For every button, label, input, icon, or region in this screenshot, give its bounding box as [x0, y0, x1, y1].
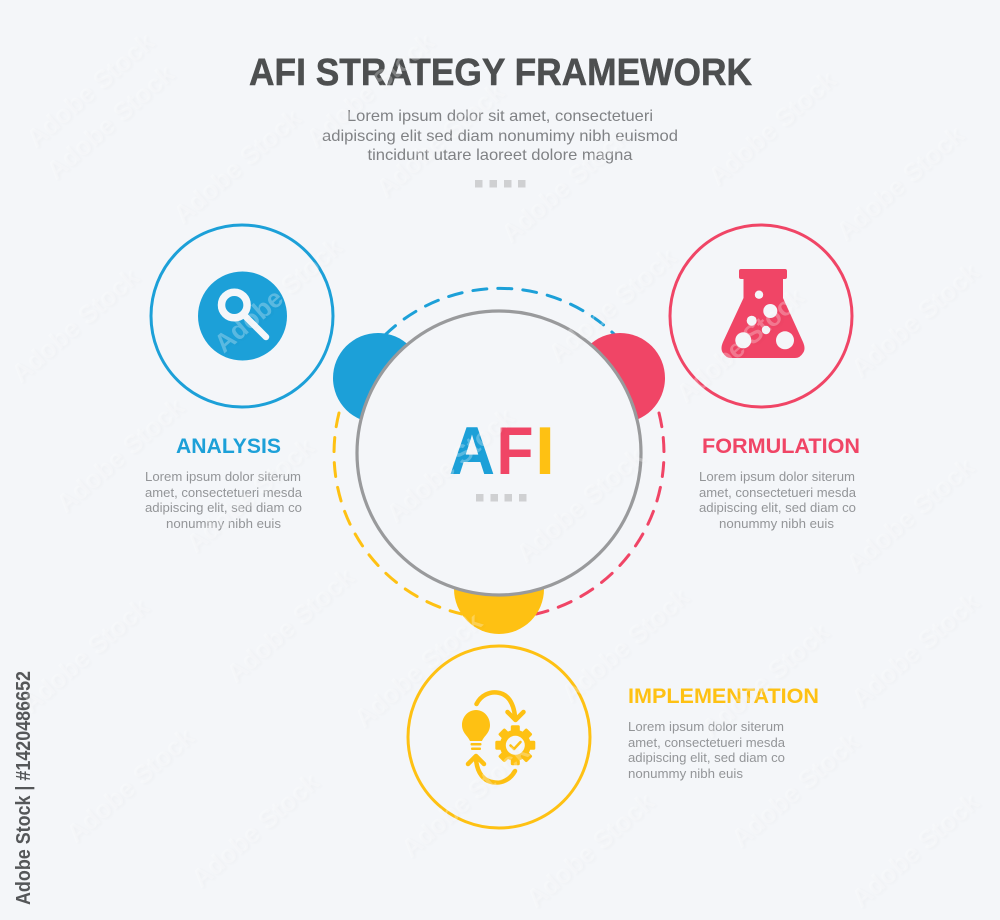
node: blue	[333, 333, 423, 423]
watermark overlay: Adobe Stock	[725, 727, 865, 853]
center label AFI: A	[449, 413, 495, 489]
text block: analysis: amet, consectetueri mesda	[145, 486, 302, 500]
watermark overlay: Adobe Stock	[830, 120, 970, 246]
watermark overlay: Adobe Stock	[520, 787, 660, 913]
text block: implementation: Lorem ipsum dolor siterum	[628, 720, 784, 734]
subtitle text	[322, 108, 678, 164]
icon: flask	[722, 269, 804, 358]
dashed ring: yellow arc	[334, 413, 462, 614]
watermark overlay: Adobe Stock	[208, 232, 348, 358]
title: AFI STRATEGY FRAMEWORK	[249, 52, 753, 94]
watermark overlay: Adobe Stock	[555, 582, 695, 708]
watermark overlay: Adobe Stock	[840, 452, 980, 578]
subtitle text: tincidunt utare laoreet dolore magna	[368, 147, 633, 164]
watermark overlay: Adobe Stock	[220, 562, 360, 688]
dashed ring: red arc	[536, 413, 664, 614]
text block: formulation	[699, 470, 856, 531]
watermark overlay: Adobe Stock	[60, 722, 200, 848]
center label AFI: I	[535, 413, 555, 489]
text block: implementation: nonummy nibh euis	[628, 767, 743, 781]
center circle	[357, 311, 641, 595]
panel: formulation icon circle	[670, 225, 852, 407]
watermark overlay: Adobe Stock	[542, 242, 682, 368]
stock id side text: Adobe Stock | #1420486652	[13, 671, 35, 905]
watermark overlay: Adobe Stock	[702, 65, 842, 191]
panel: implementation icon circle	[408, 646, 590, 828]
text block: formulation: adipiscing elit, sed diam co	[699, 501, 856, 515]
watermark overlay: Adobe Stock	[695, 617, 835, 743]
header dots	[475, 180, 526, 188]
watermark overlay: Adobe Stock	[300, 27, 440, 153]
watermark overlay: Adobe Stock	[5, 262, 145, 388]
text block: formulation: nonummy nibh euis	[719, 517, 834, 531]
watermark overlay: Adobe Stock	[180, 432, 320, 558]
node: red	[575, 333, 665, 423]
text block: implementation: adipiscing elit, sed diam co	[628, 751, 785, 765]
watermark overlay: Adobe Stock	[370, 77, 510, 203]
watermark overlay: Adobe Stock	[670, 282, 810, 408]
text block: analysis: Lorem ipsum dolor siterum	[145, 470, 301, 484]
watermark overlay: Adobe Stock	[185, 767, 325, 893]
center dots	[476, 494, 526, 502]
watermark overlay: Adobe Stock	[845, 257, 985, 383]
text block: formulation: Lorem ipsum dolor siterum	[699, 470, 855, 484]
text block: analysis	[145, 470, 302, 531]
watermark overlay: Adobe Stock	[495, 122, 635, 248]
watermark overlay: Adobe Stock	[40, 59, 180, 185]
heading: analysis: ANALYSIS	[176, 435, 281, 458]
text block: formulation: amet, consectetueri mesda	[699, 486, 856, 500]
text block: implementation: amet, consectetueri mesda	[628, 736, 785, 750]
dashed ring: blue arc	[385, 288, 615, 335]
center label AFI: F	[496, 413, 534, 489]
watermark overlay: Adobe Stock	[20, 27, 160, 153]
watermark overlay: Adobe Stock	[50, 392, 190, 518]
watermark overlay: Adobe Stock	[348, 607, 488, 733]
heading: formulation: FORMULATION	[702, 435, 860, 458]
subtitle text: Lorem ipsum dolor sit amet, consectetueri	[347, 108, 653, 125]
panel: analysis icon circle	[151, 225, 333, 407]
watermark overlay: Adobe Stock	[167, 103, 307, 229]
watermark overlay: Adobe Stock	[380, 402, 520, 528]
node: yellow	[454, 544, 544, 634]
watermark overlay: Adobe Stock	[15, 592, 155, 718]
watermark overlay: Adobe Stock	[845, 587, 985, 713]
icon: bulb, gear and cycle arrows	[462, 692, 535, 783]
text block: analysis: adipiscing elit, sed diam co	[145, 501, 302, 515]
watermark overlay: Adobe Stock	[395, 737, 535, 863]
icon: magnifier	[198, 272, 287, 360]
subtitle text: adipiscing elit sed diam nonumimy nibh euismod	[322, 128, 678, 145]
watermark overlay: Adobe Stock	[845, 787, 985, 913]
text block: implementation	[628, 720, 785, 781]
watermark overlay: Adobe Stock	[510, 442, 650, 568]
center label AFI	[449, 413, 555, 489]
heading: implementation: IMPLEMENTATION	[628, 685, 819, 708]
text block: analysis: nonummy nibh euis	[166, 517, 281, 531]
